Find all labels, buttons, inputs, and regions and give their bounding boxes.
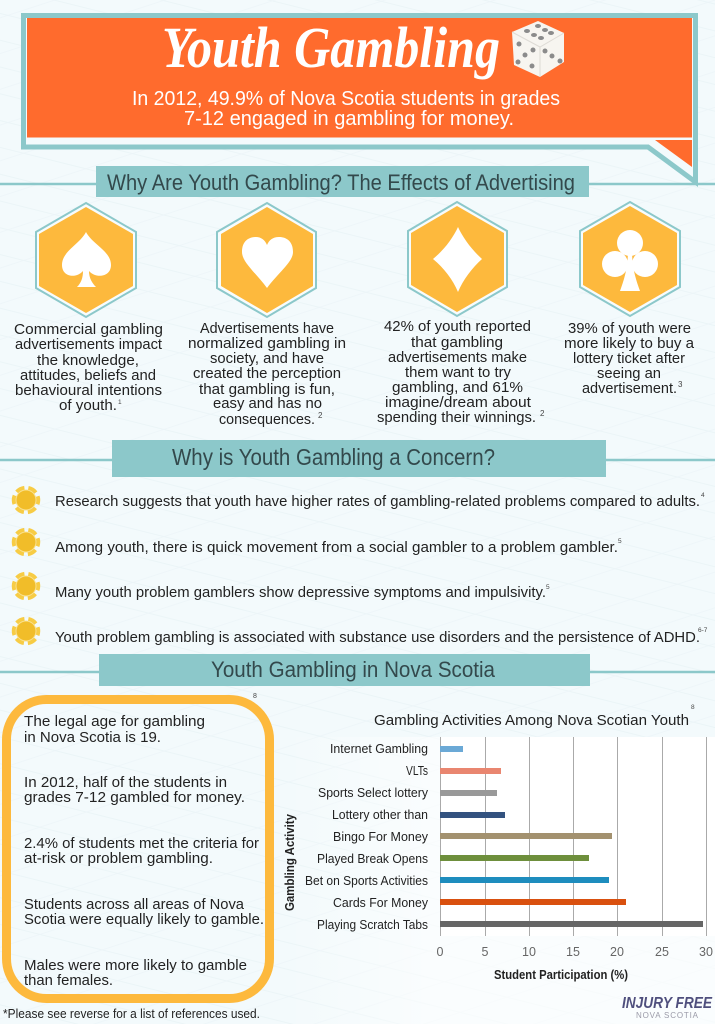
heading: nova scotia: Youth Gambling in Nova Scotia <box>211 657 496 682</box>
category labels: Played Break Opens <box>317 852 428 866</box>
bullet: substance use: Youth problem gambling is associated with substance use disorders and the persistence of ADHD. <box>55 630 700 646</box>
bullet: substance use <box>14 619 708 646</box>
bullet: depressive symptoms: 5 <box>546 584 550 591</box>
panel: key facts: Scotia were equally likely to gamble. <box>24 911 264 928</box>
bullet: depressive symptoms <box>14 574 550 601</box>
text: 42 percent: 42% of youth reported <box>384 319 531 335</box>
bullet: quick movement: Among youth, there is quick movement from a social gambler to a problem gambler. <box>55 540 618 556</box>
axis ticks: 0 <box>437 945 444 959</box>
title: Youth Gambling <box>162 15 500 80</box>
text: 39 percent: advertisement. <box>582 381 677 397</box>
panel: club <box>564 202 695 397</box>
category labels: Playing Scratch Tabs <box>317 918 428 932</box>
subtitle: In 2012, 49.9% of Nova Scotia students in grades <box>132 88 560 110</box>
panel: key facts: at-risk or problem gambling. <box>24 850 213 867</box>
heading: concern <box>112 440 606 477</box>
text: commercial advertising: advertisements impact <box>15 337 162 353</box>
bullet: higher rates: Research suggests that youth have higher rates of gambling-related problems compared to adults. <box>55 494 700 510</box>
panel: key facts: In 2012, half of the students in <box>24 774 227 791</box>
panel: key facts: than females. <box>24 972 113 989</box>
text: 39 percent: more likely to buy a <box>564 336 695 352</box>
panel: key facts: in Nova Scotia is 19. <box>24 729 161 746</box>
panel: key facts: The legal age for gambling <box>24 713 205 730</box>
text: normalized gambling: 2 <box>318 411 323 420</box>
text: commercial advertising <box>14 322 163 414</box>
footnote: *Please see reverse for a list of references used. <box>3 1007 260 1021</box>
text: 42 percent: 2 <box>540 409 545 418</box>
text: commercial advertising: 1 <box>118 399 122 406</box>
bar chart <box>283 704 715 1024</box>
icon: spade hexagon <box>36 203 136 317</box>
text: commercial advertising: the knowledge, <box>37 353 139 369</box>
icon: club hexagon <box>580 202 680 316</box>
x axis title: Student Participation (%) <box>494 968 628 982</box>
panel: key facts: Males were more likely to gamble <box>24 957 247 974</box>
category labels: Bingo For Money <box>333 830 429 844</box>
bullet: substance use: 6-7 <box>698 627 708 634</box>
text: normalized gambling: that gambling is fun, <box>199 382 335 398</box>
subtitle: 7-12 engaged in gambling for money. <box>184 108 514 130</box>
icon: dice <box>512 21 564 77</box>
category labels: Lottery other than <box>332 808 428 822</box>
text: 39 percent: seeing an <box>597 366 661 382</box>
text: 39 percent: lottery ticket after <box>573 351 685 367</box>
text: 42 percent: that gambling <box>411 335 503 351</box>
text: normalized gambling <box>188 321 346 428</box>
category labels: Sports Select lottery <box>318 786 429 800</box>
text: 42 percent: spending their winnings. <box>377 410 536 426</box>
text: normalized gambling: consequences. <box>219 412 315 428</box>
text: normalized gambling: society, and have <box>210 351 324 367</box>
category labels: Bet on Sports Activities <box>305 874 428 888</box>
text: normalized gambling: normalized gambling in <box>188 336 346 352</box>
text: 39 percent: 39% of youth were <box>568 321 691 337</box>
list: concerns <box>14 488 708 646</box>
panel: heart <box>188 203 346 428</box>
chart title: Gambling Activities Among Nova Scotian Youth <box>374 712 689 729</box>
bars <box>440 746 703 927</box>
text: normalized gambling: easy and has no <box>213 396 322 412</box>
axis ticks: 10 <box>522 945 536 959</box>
axis ticks: 30 <box>699 945 713 959</box>
bullet: higher rates <box>14 488 705 512</box>
panel: key facts: grades 7-12 gambled for money. <box>24 789 245 806</box>
y axis title: Gambling Activity <box>283 814 297 911</box>
panel: key facts: 8 <box>253 693 257 700</box>
text: commercial advertising: of youth. <box>59 398 117 414</box>
bullet: quick movement: 5 <box>618 538 622 545</box>
heading: nova scotia <box>99 654 590 686</box>
bullet: higher rates: 4 <box>701 492 705 499</box>
text: normalized gambling: Advertisements have <box>200 321 334 337</box>
bullet: quick movement <box>14 530 622 556</box>
axis ticks: 15 <box>566 945 580 959</box>
logo: injury free: NOVA SCOTIA <box>636 1011 699 1020</box>
text: 42 percent <box>377 319 545 426</box>
bullet: depressive symptoms: Many youth problem gamblers show depressive symptoms and impulsivity. <box>55 585 546 601</box>
icon: diamond hexagon <box>408 202 507 316</box>
header banner <box>24 15 696 182</box>
panel: key facts <box>6 693 270 998</box>
panel: diamond <box>377 202 545 426</box>
category labels: Cards For Money <box>333 896 429 910</box>
panel: spade <box>14 203 163 414</box>
axis ticks: 25 <box>655 945 669 959</box>
text: commercial advertising: Commercial gambling <box>14 322 163 338</box>
text: 39 percent: 3 <box>678 380 683 389</box>
text: 42 percent: them want to try <box>405 365 512 381</box>
text: commercial advertising: behavioural intentions <box>15 383 162 399</box>
heading: effects of advertising: Why Are Youth Gambling? The Effects of Advertising <box>107 170 575 195</box>
axis ticks: 5 <box>482 945 489 959</box>
icon: heart hexagon <box>217 203 316 317</box>
bar chart: 8 <box>691 704 695 711</box>
panel: key facts: 2.4% of students met the criteria for <box>24 835 259 852</box>
subtitle <box>132 88 560 130</box>
text: 39 percent <box>564 321 695 397</box>
category labels: Internet Gambling <box>330 742 428 756</box>
axis ticks: 20 <box>610 945 624 959</box>
logo: injury free <box>622 995 713 1020</box>
text: 42 percent: advertisements make <box>388 350 527 366</box>
category labels <box>305 742 429 932</box>
category labels: VLTs <box>406 764 428 778</box>
text: 42 percent: imagine/dream about <box>385 395 531 411</box>
text: 42 percent: gambling, and 61% <box>392 380 523 396</box>
text: normalized gambling: created the perception <box>193 366 341 382</box>
panel: key facts: Students across all areas of Nova <box>24 896 245 913</box>
text: commercial advertising: attitudes, beliefs and <box>20 368 156 384</box>
heading: concern: Why is Youth Gambling a Concern? <box>172 444 495 470</box>
axis ticks <box>437 945 713 959</box>
